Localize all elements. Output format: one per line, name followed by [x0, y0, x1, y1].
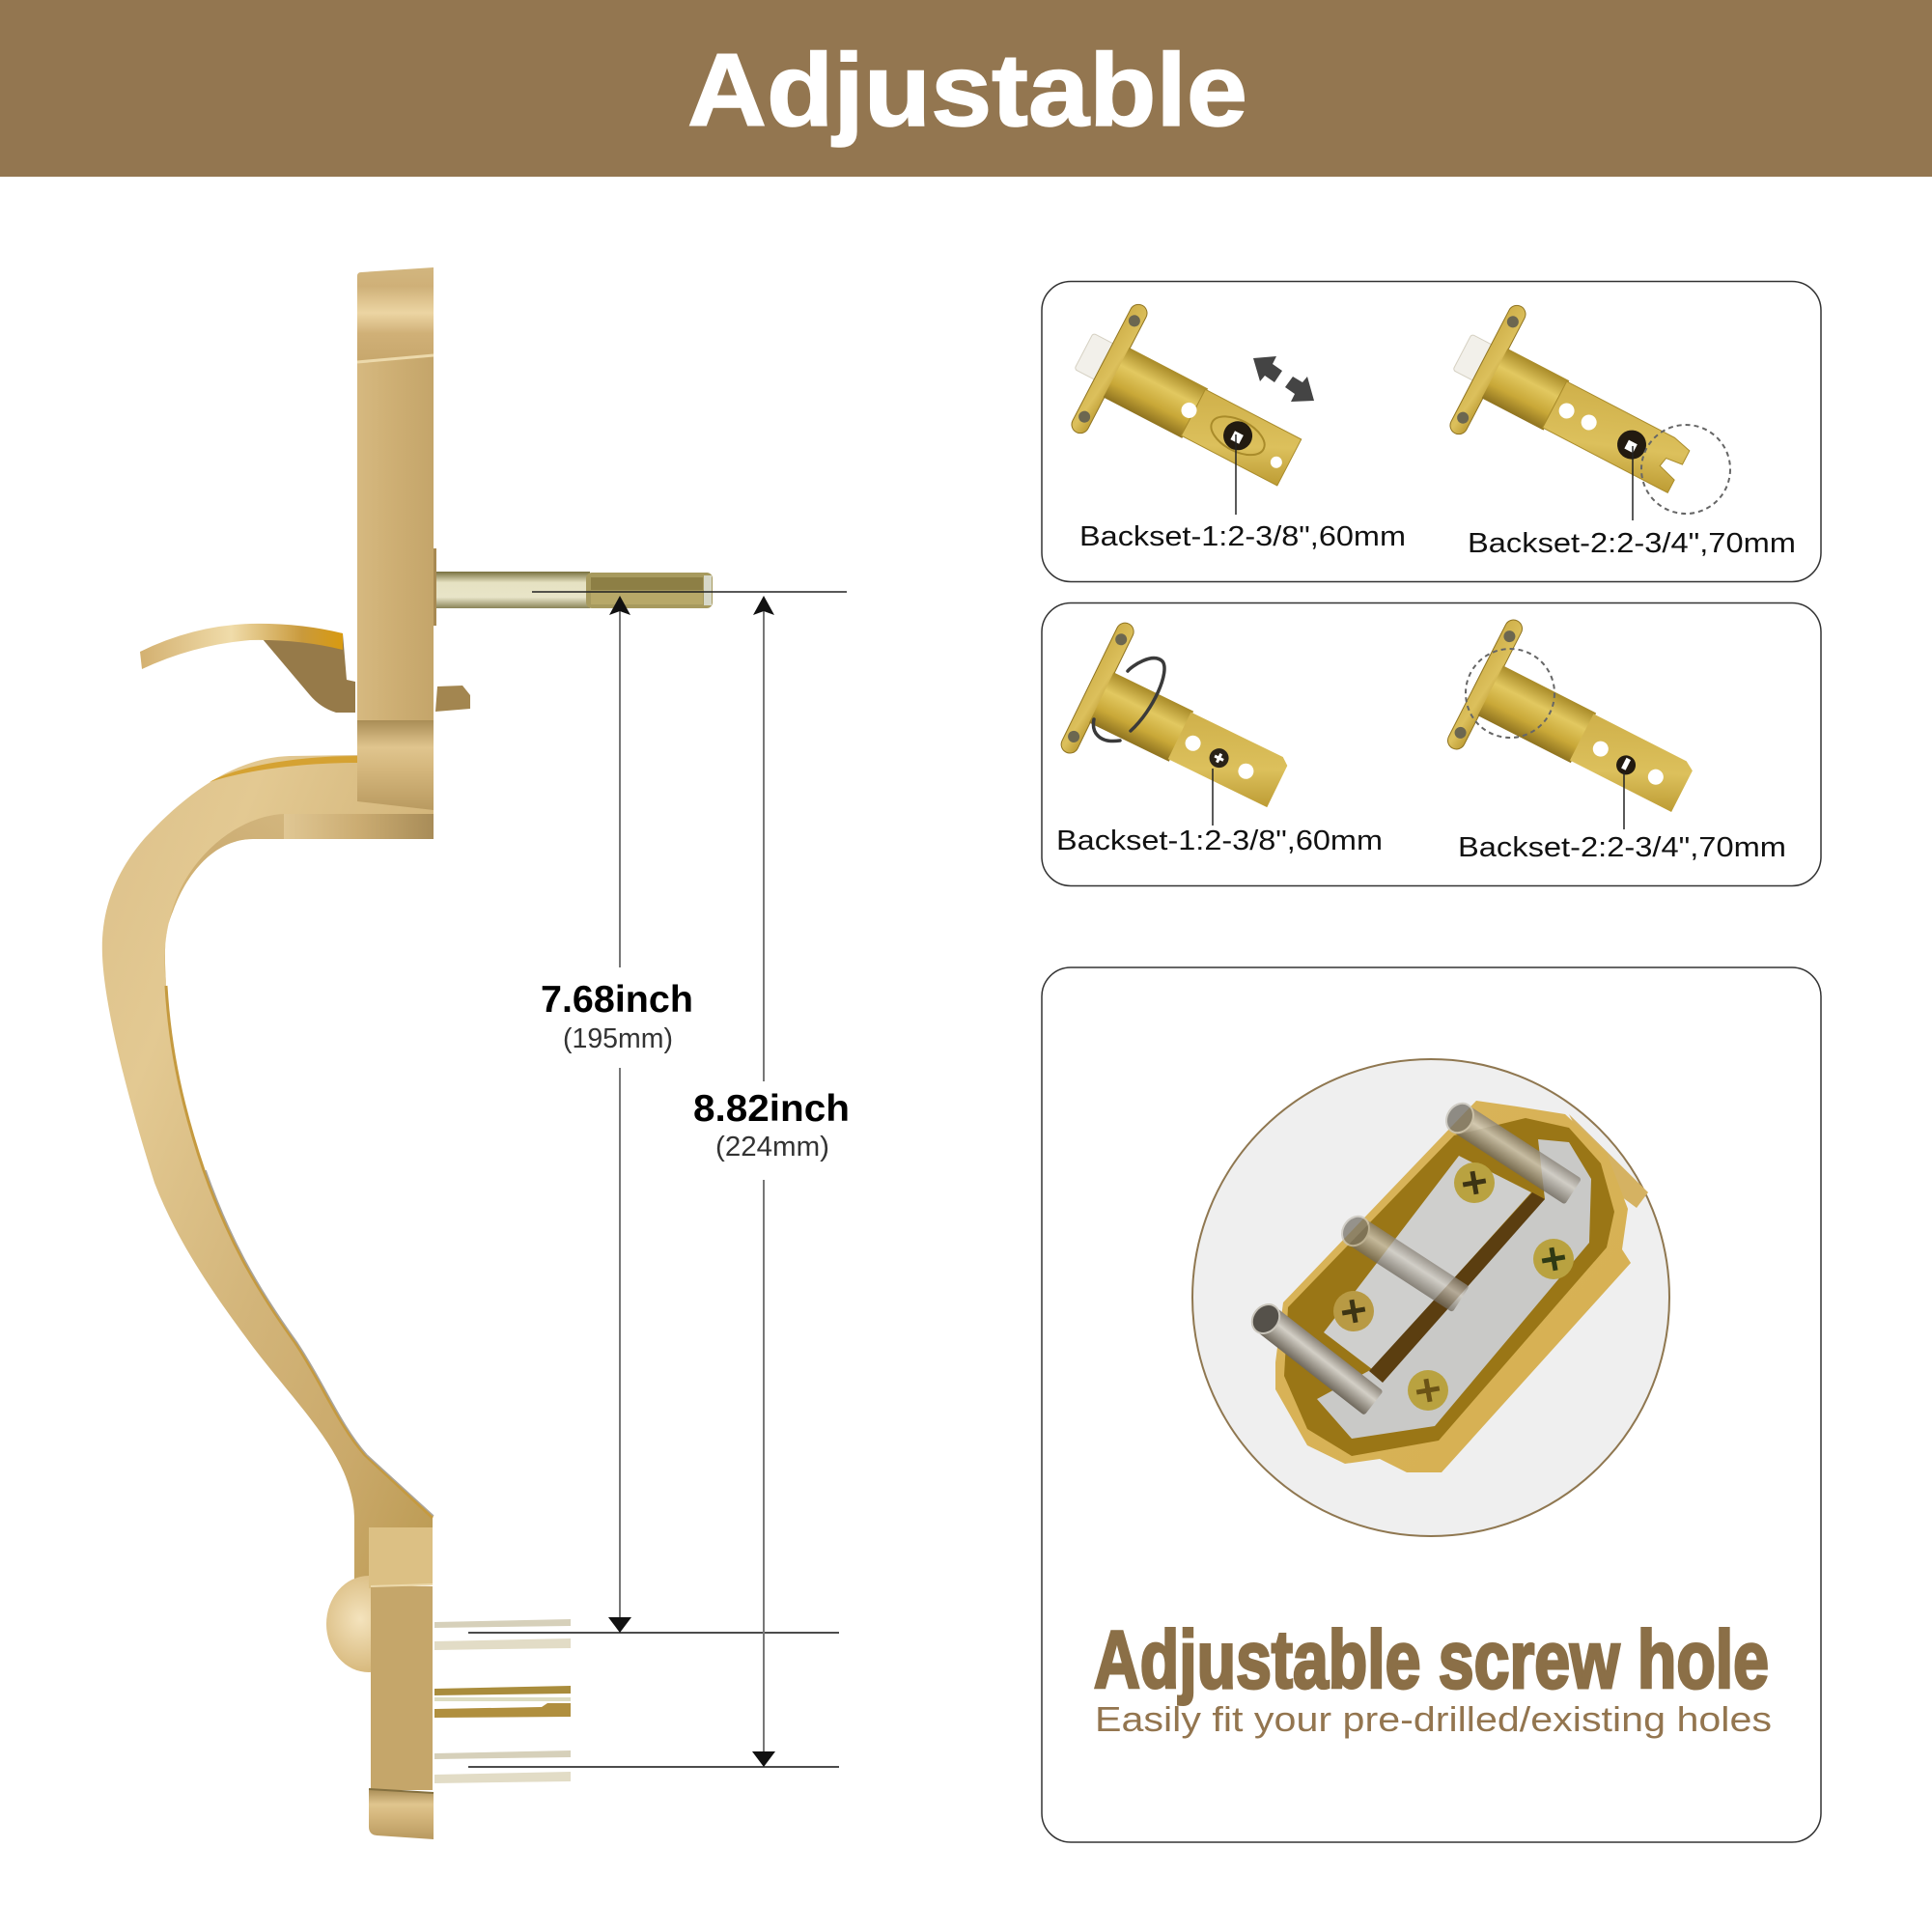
title: Adjustable	[687, 32, 1247, 148]
latch 2	[1427, 293, 1713, 533]
dimension: 8.82 inch arrow	[752, 596, 775, 1767]
dimension label: 8.82 inch	[693, 1088, 850, 1162]
slot	[1369, 1192, 1545, 1383]
latch 4 leader line	[1623, 772, 1625, 829]
adjustment double arrow	[1253, 356, 1314, 402]
cavity	[1284, 1118, 1614, 1456]
spindle	[432, 548, 713, 626]
header band	[0, 0, 1932, 177]
top mounting plate	[357, 267, 434, 810]
gold rim	[1275, 1101, 1631, 1472]
dimension label: 8.82 inch: (224mm)	[715, 1132, 829, 1162]
latch 3	[1058, 620, 1313, 842]
circular photo of back plate	[1192, 1059, 1669, 1536]
curved handle grip	[102, 755, 434, 1583]
latch 2 label: Backset-2:2-3/4",70mm	[1468, 528, 1796, 559]
dimension label: 7.68 inch	[541, 979, 693, 1054]
latch 2 leader line	[1632, 446, 1634, 520]
screws	[1333, 1162, 1574, 1411]
latch 1 leader line	[1235, 434, 1237, 515]
subheading: Easily fit your pre-drilled/existing holes	[1095, 1699, 1772, 1739]
latch 4 label: Backset-2:2-3/4",70mm	[1458, 832, 1786, 863]
panel: backset adjustment	[1042, 282, 1821, 581]
gray metal plate	[1317, 1139, 1591, 1439]
gray slab	[1324, 1156, 1531, 1369]
heading: adjustable screw hole: Adjustable screw hole	[1094, 1614, 1769, 1705]
dashed highlight circle	[1641, 425, 1730, 514]
latch tab	[435, 686, 470, 712]
latch 3 label: Backset-1:2-3/8",60mm	[1056, 826, 1383, 856]
dimension: 7.68 inch arrow	[608, 596, 631, 1633]
handle stub	[1569, 1114, 1648, 1208]
latch 4	[1444, 617, 1717, 850]
mounting pins	[434, 1619, 571, 1783]
dimension: reference lines	[468, 592, 847, 1767]
latch 1 label: Backset-1:2-3/8",60mm	[1079, 521, 1406, 552]
dimension label: 7.68 inch: (195mm)	[563, 1023, 673, 1054]
dimension label: 8.82 inch: 8.82inch	[693, 1088, 850, 1130]
pins	[1246, 1099, 1582, 1415]
handleset side view	[102, 267, 713, 1839]
dashed highlight circle	[1466, 649, 1554, 738]
bottom mounting plate	[369, 1527, 434, 1839]
panel: adjustable screw hole	[1042, 967, 1821, 1842]
dimension label: 7.68 inch: 7.68inch	[541, 979, 693, 1021]
rotation ring	[1093, 658, 1164, 742]
latch 1	[1049, 292, 1322, 526]
panel: backset rotation	[1042, 602, 1821, 886]
thumb ball	[326, 1576, 411, 1672]
latch 3 leader line	[1212, 769, 1214, 826]
lever	[140, 624, 355, 713]
